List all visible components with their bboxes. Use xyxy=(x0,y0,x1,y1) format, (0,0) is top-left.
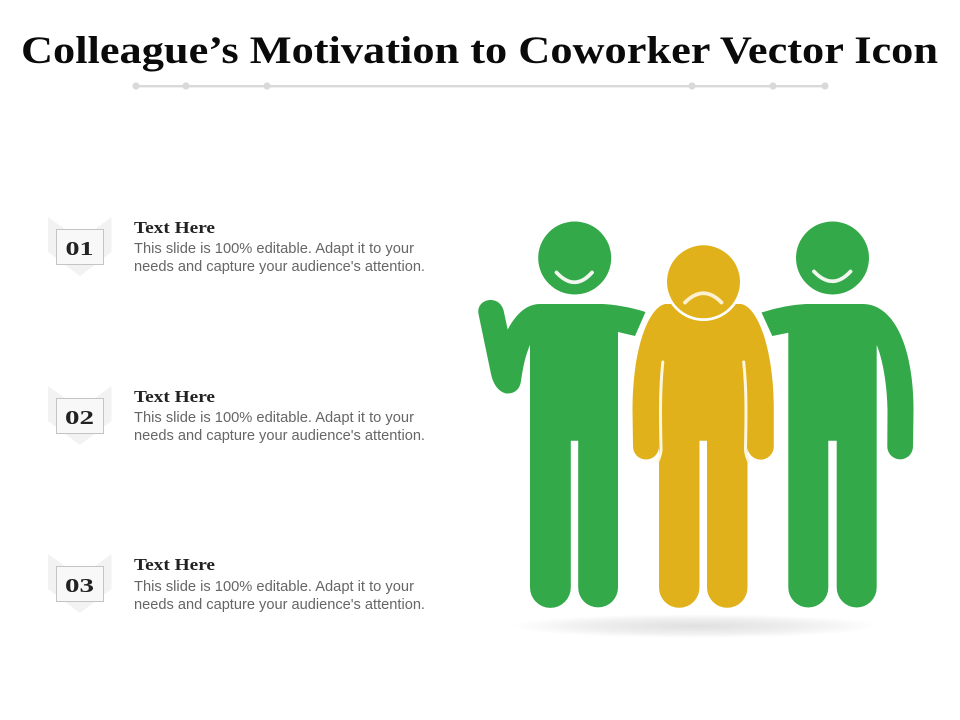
text block 02 xyxy=(134,387,425,444)
figure: right green smiling coworker xyxy=(762,222,914,608)
text block 02: Text Here xyxy=(134,387,216,406)
badge 01 xyxy=(48,217,112,276)
body with arm xyxy=(762,304,914,608)
text block 02: needs and capture your audience's attention. xyxy=(134,428,425,444)
title divider with dots xyxy=(132,82,829,90)
item 02 xyxy=(48,386,425,445)
text block 03: Text Here xyxy=(134,555,216,574)
text block 02: This slide is 100% editable. Adapt it to your xyxy=(134,410,414,426)
head xyxy=(796,222,869,294)
body with raised arm xyxy=(478,300,646,608)
badge 03 xyxy=(48,554,112,613)
badge 01: 01 xyxy=(66,239,94,260)
smile xyxy=(814,272,850,281)
text block 03 xyxy=(134,555,425,613)
head xyxy=(667,245,740,318)
item 01 xyxy=(48,217,425,276)
badge 02 xyxy=(48,386,112,445)
body xyxy=(632,304,774,608)
figure: centre yellow sad colleague xyxy=(632,243,774,608)
text block 03: needs and capture your audience's attention. xyxy=(134,597,425,613)
badge 03: 03 xyxy=(65,576,94,597)
title: Colleague’s Motivation to Coworker Vector Icon xyxy=(21,28,938,72)
head ring xyxy=(664,243,743,321)
smile xyxy=(556,272,592,282)
text block 01 xyxy=(134,218,425,275)
frown xyxy=(685,293,722,302)
ground shadow xyxy=(511,614,879,638)
item 03 xyxy=(48,554,425,613)
arm separators xyxy=(658,362,748,461)
head xyxy=(538,222,611,294)
figure: left green smiling coworker xyxy=(478,222,646,608)
text block 03: This slide is 100% editable. Adapt it to your xyxy=(134,579,414,595)
text block 01: This slide is 100% editable. Adapt it to your xyxy=(134,241,414,257)
badge 02: 02 xyxy=(65,408,94,429)
text block 01: needs and capture your audience's attention. xyxy=(134,259,425,275)
text block 01: Text Here xyxy=(134,218,216,237)
